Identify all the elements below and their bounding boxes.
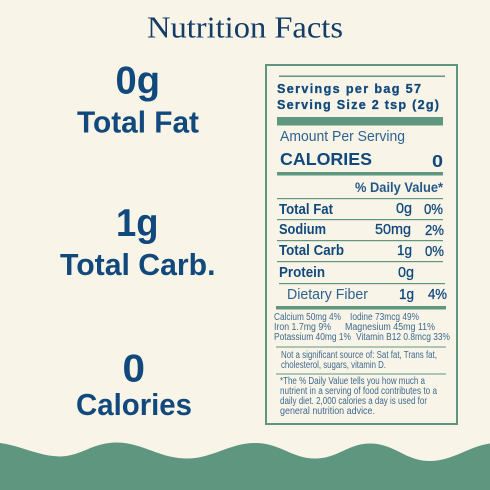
- nutrient table: 1g: [399, 287, 414, 303]
- daily value footnote: general nutrition advice.: [280, 406, 375, 417]
- not a significant source note: [281, 350, 437, 371]
- daily value footnote: daily diet. 2,000 calories a day is used for: [280, 396, 428, 407]
- vitamins and minerals: Iron 1.7mg 9%: [274, 322, 331, 333]
- nutrient table: Dietary Fiber: [287, 287, 368, 303]
- daily value footnote: nutrient in a serving of food contributes to a: [280, 386, 437, 397]
- calories block: Amount Per Serving: [280, 129, 405, 145]
- vitamins and minerals: Potassium 40mg 1%: [274, 332, 351, 343]
- stat: total carb: Total Carb.: [60, 247, 216, 282]
- panel: nutrition label: [266, 65, 457, 424]
- vitamins and minerals: Iodine 73mcg 49%: [350, 312, 419, 323]
- nutrient table: Total Carb: [279, 243, 344, 259]
- nutrient table: Sodium: [279, 222, 326, 238]
- nutrient table: 0g: [396, 201, 412, 217]
- vitamins and minerals: Vitamin B12 0.8mcg 33%: [356, 332, 450, 343]
- calories block: CALORIES: [280, 149, 372, 169]
- stat: total fat: Total Fat: [77, 106, 199, 140]
- stat: total fat: 0g: [116, 60, 160, 102]
- daily value footnote: [280, 376, 437, 417]
- servings text: Serving Size 2 tsp (2g): [277, 98, 439, 112]
- calories block: 0: [432, 151, 443, 171]
- daily value heading: % Daily Value*: [355, 180, 444, 195]
- nutrient table: 0%: [424, 202, 443, 218]
- stat: calories: [76, 348, 192, 422]
- green wave footer: [0, 442, 490, 490]
- stat: calories: 0: [122, 348, 145, 390]
- nutrient table: Protein: [279, 265, 325, 281]
- vitamins and minerals: Calcium 50mg 4%: [274, 312, 341, 323]
- stat: total carb: 1g: [116, 202, 158, 245]
- servings text: [277, 82, 439, 112]
- vitamins and minerals: [274, 312, 450, 343]
- servings text: Servings per bag 57: [277, 82, 421, 96]
- stat: calories: Calories: [76, 387, 192, 422]
- not a significant source note: cholesterol, sugars, vitamin D.: [281, 360, 386, 371]
- stat: total carb: [60, 202, 216, 282]
- nutrient table: Total Fat: [279, 202, 333, 218]
- nutrient table: 50mg: [375, 222, 411, 238]
- nutrient table: [279, 201, 447, 303]
- daily value footnote: *The % Daily Value tells you how much a: [280, 376, 425, 387]
- not a significant source note: Not a significant source of: Sat fat, Trans fat,: [281, 350, 437, 361]
- nutrient table: 2%: [425, 223, 444, 239]
- nutrient table: 1g: [397, 243, 412, 259]
- title: Nutrition Facts: [147, 10, 343, 44]
- nutrient table: 0%: [425, 244, 444, 260]
- vitamins and minerals: Magnesium 45mg 11%: [345, 322, 435, 333]
- nutrient table: 4%: [428, 287, 447, 303]
- nutrient table: 0g: [398, 265, 414, 281]
- stat: total fat: [77, 60, 199, 140]
- calories block: [280, 129, 443, 171]
